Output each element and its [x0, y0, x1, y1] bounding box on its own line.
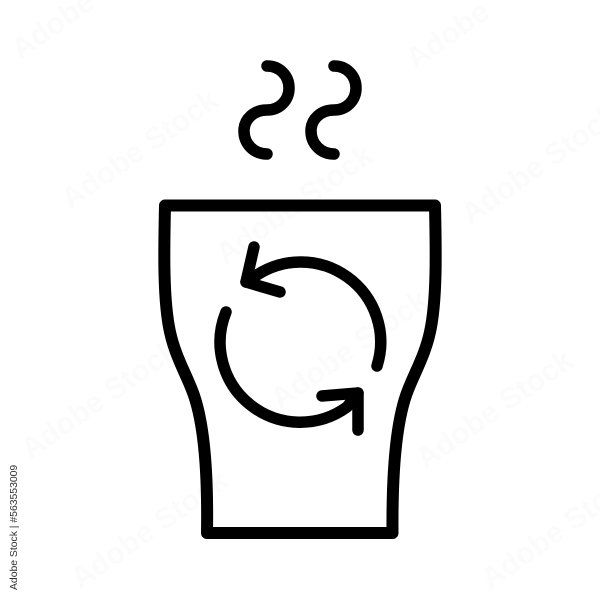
icon: reusable hot cup: Adobe Stock — [410, 343, 579, 476]
icon: right steam wave — [311, 66, 356, 154]
icon: reusable hot cup: Adobe Stock — [15, 333, 184, 466]
icon: reusable hot cup: Adobe Stock — [210, 138, 379, 271]
icon: reusable hot cup: Adobe Stock — [55, 83, 224, 216]
cup outline — [164, 206, 436, 533]
icon: left steam wave — [244, 66, 289, 154]
icon: upper circular arrow — [246, 247, 381, 366]
icon: lower circular arrow — [220, 312, 358, 430]
stock credit text: Adobe Stock | #563553009 — [9, 465, 20, 590]
icon: reusable hot cup: Adobe Stock — [65, 463, 234, 596]
icon: reusable hot cup: Adobe Stock — [265, 283, 434, 416]
